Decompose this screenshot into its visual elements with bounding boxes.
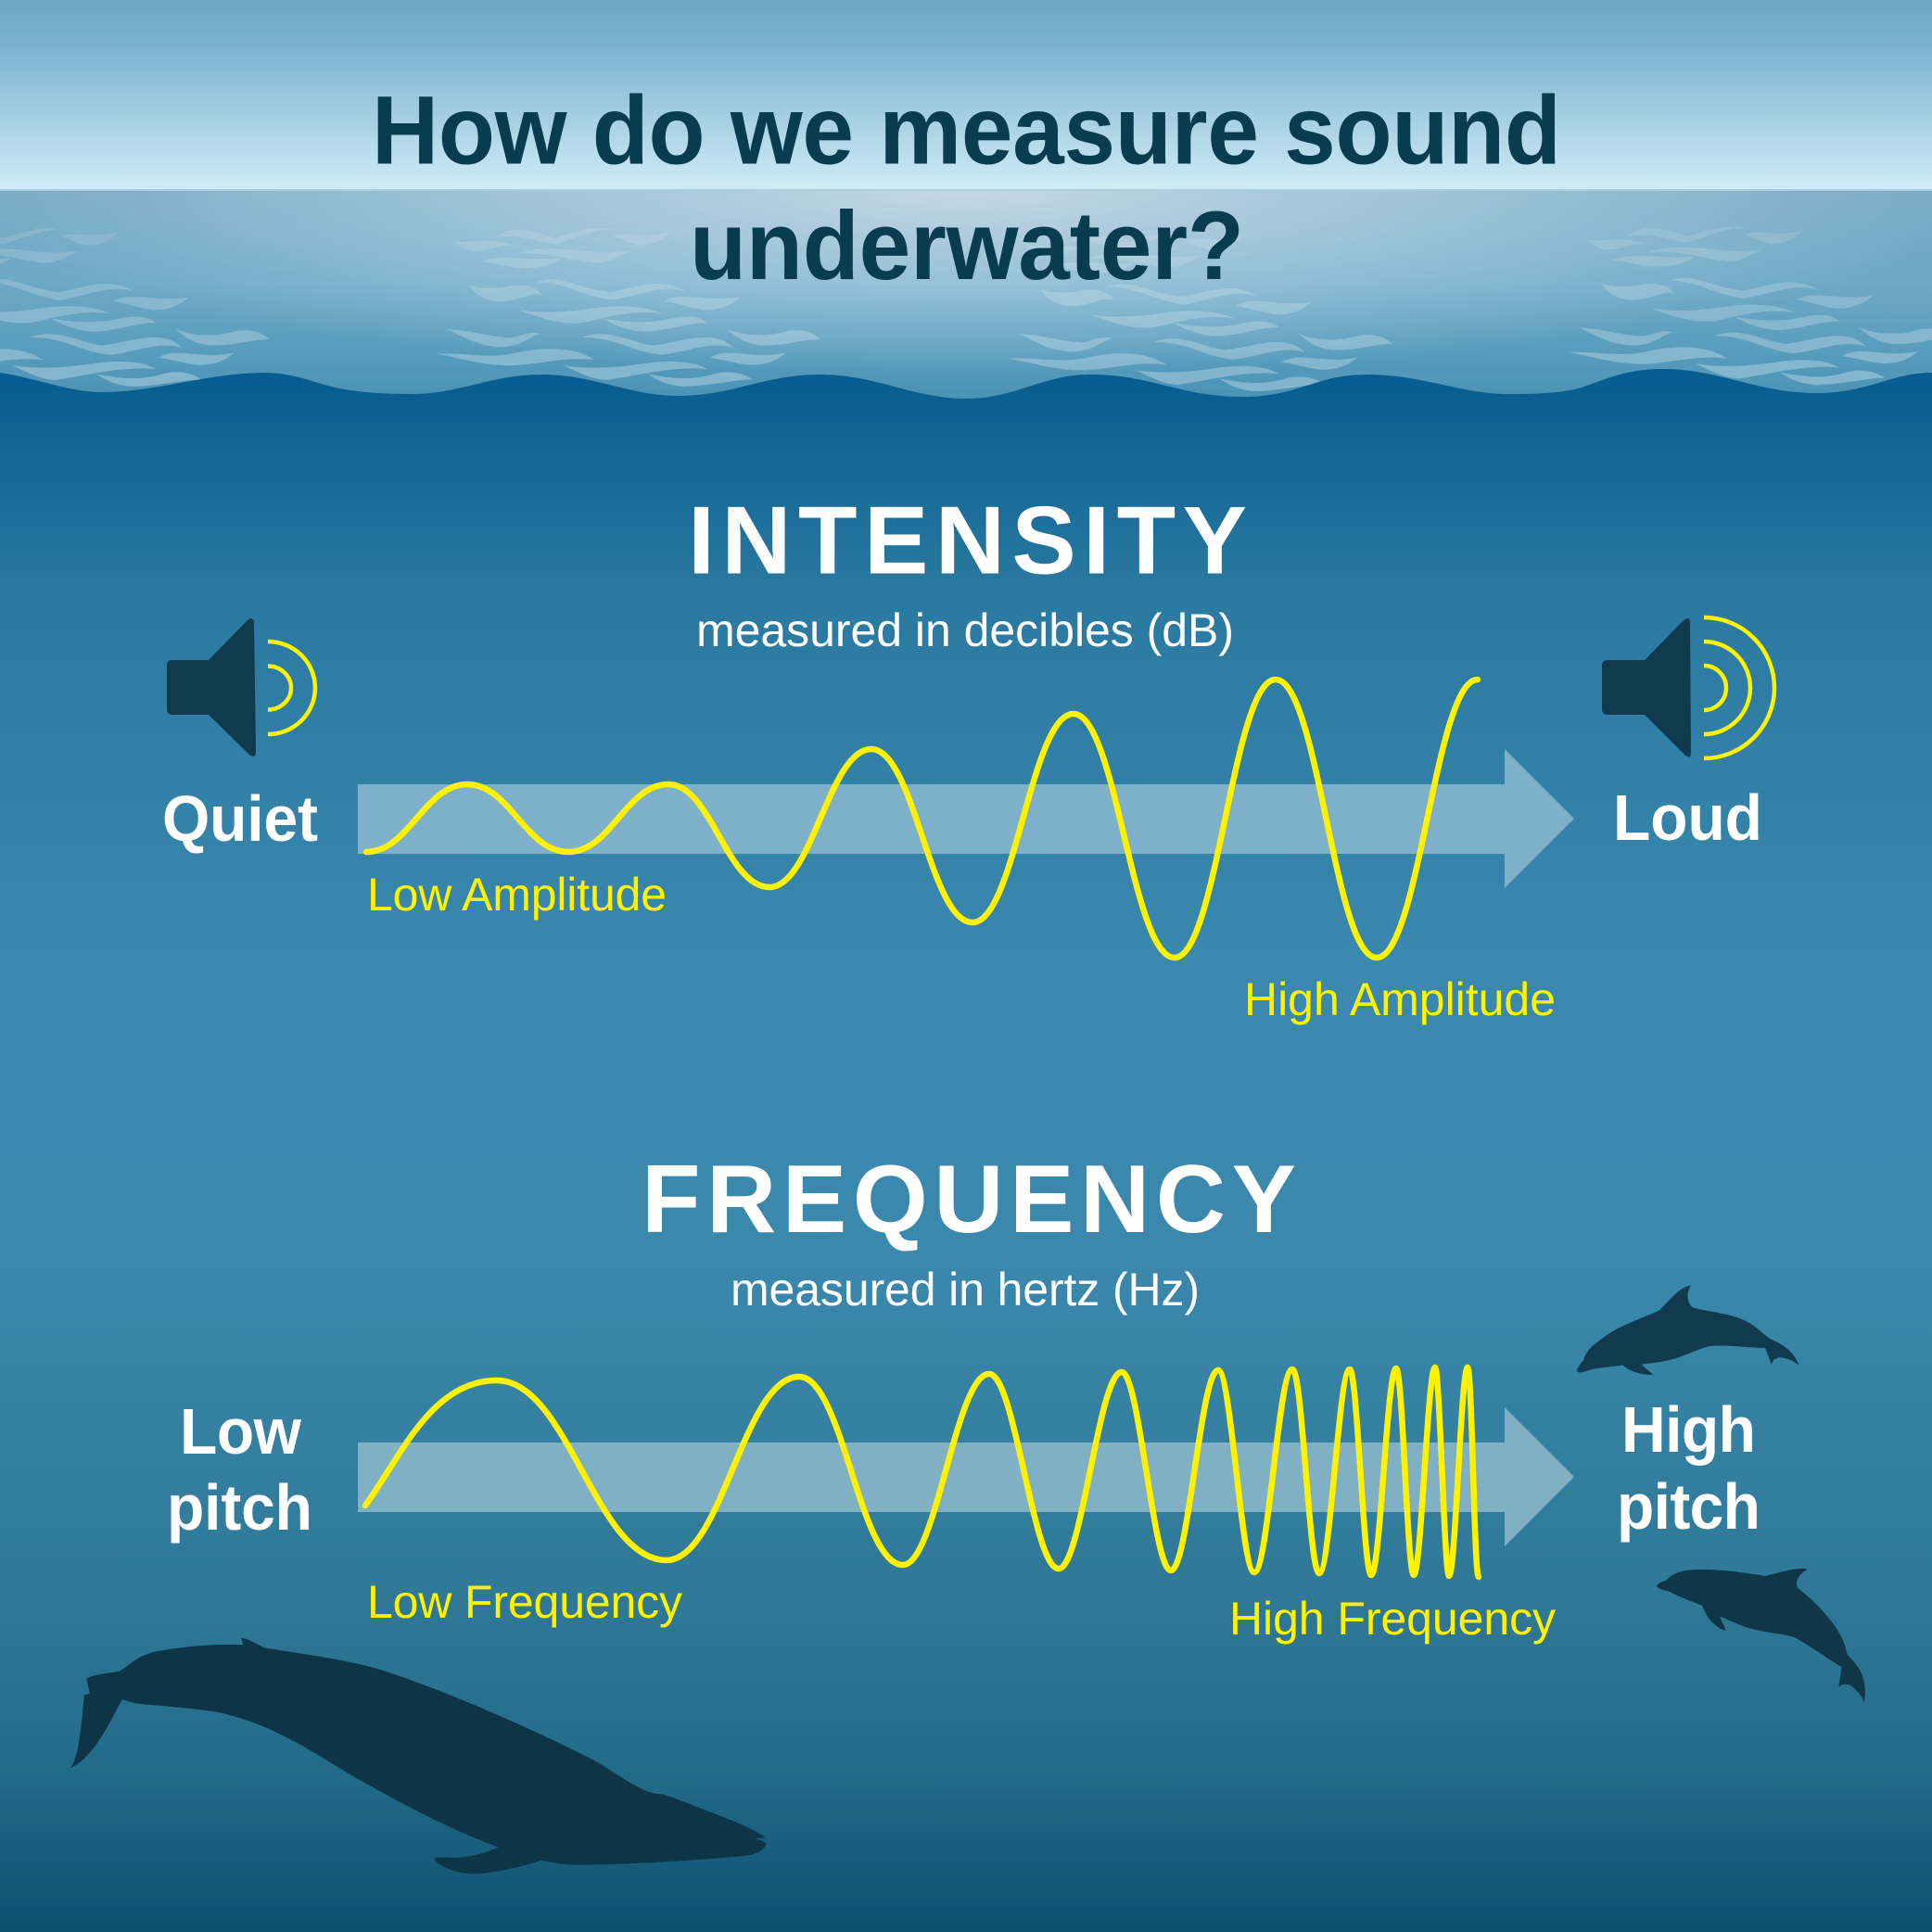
silhouette: lower dolphin bbox=[1657, 1569, 1865, 1703]
label: low pitch: pitch bbox=[167, 1473, 312, 1544]
label: low pitch bbox=[167, 1397, 312, 1544]
label: low pitch: Low bbox=[180, 1397, 301, 1468]
icon: loud speaker bbox=[1602, 617, 1774, 758]
silhouette: whale bbox=[70, 1638, 766, 1874]
label: high amplitude: High Amplitude bbox=[1244, 973, 1556, 1025]
title line 1: How do we measure sound bbox=[372, 75, 1561, 184]
label: loud: Loud bbox=[1613, 783, 1762, 854]
background: sky band bbox=[0, 0, 1932, 190]
surface wavelets bbox=[0, 226, 1932, 391]
label: low amplitude: Low Amplitude bbox=[367, 869, 667, 921]
title bbox=[372, 75, 1561, 299]
heading: intensity: INTENSITY bbox=[688, 488, 1247, 595]
subheading: decibels: measured in decibles (dB) bbox=[696, 604, 1234, 656]
label: low frequency: Low Frequency bbox=[367, 1576, 682, 1628]
heading: frequency: FREQUENCY bbox=[642, 1146, 1296, 1253]
arrow: quiet to loud bbox=[358, 749, 1574, 888]
silhouette: upper dolphin bbox=[1577, 1286, 1799, 1375]
background: horizon band bbox=[0, 189, 1932, 413]
icon: quiet speaker bbox=[167, 618, 315, 756]
arrow: low to high pitch bbox=[358, 1407, 1574, 1546]
label: high pitch bbox=[1617, 1395, 1760, 1543]
panel: frequency bbox=[167, 1146, 1760, 1645]
label: quiet: Quiet bbox=[162, 784, 318, 855]
wave: frequency bbox=[365, 1367, 1479, 1577]
label: high pitch: pitch bbox=[1617, 1472, 1760, 1543]
label: high pitch: High bbox=[1621, 1395, 1756, 1466]
panel: intensity bbox=[162, 488, 1774, 1025]
subheading: hertz: measured in hertz (Hz) bbox=[731, 1264, 1200, 1316]
label: high frequency: High Frequency bbox=[1229, 1593, 1556, 1645]
title line 2: underwater? bbox=[690, 191, 1244, 299]
wave: amplitude bbox=[366, 680, 1478, 958]
